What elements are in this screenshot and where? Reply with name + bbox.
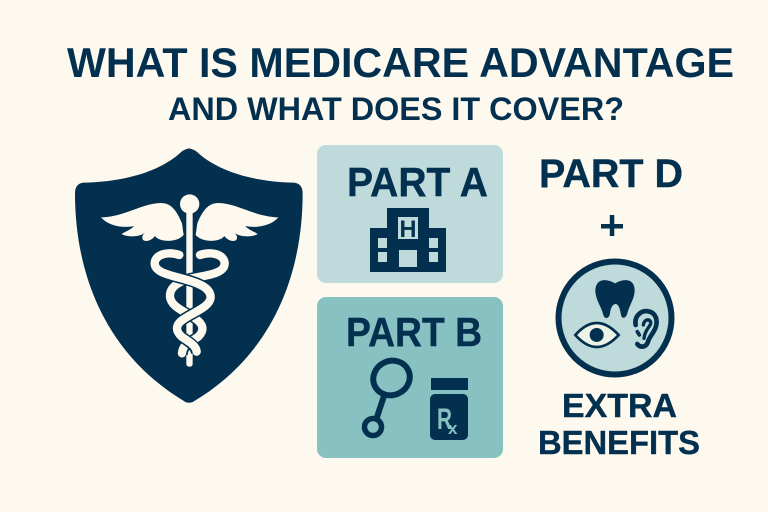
icon: eye bbox=[575, 323, 619, 347]
icon: shield with caduceus bbox=[75, 148, 303, 403]
Part A label: PART A bbox=[347, 159, 488, 205]
panel: Part A bbox=[317, 145, 503, 283]
title bbox=[67, 39, 734, 127]
icon: Rx bottle bbox=[430, 378, 468, 440]
icon: tooth bbox=[595, 280, 635, 318]
icon: magnifier bbox=[364, 355, 415, 436]
plus sign bbox=[601, 215, 623, 236]
panel: Part B bbox=[317, 297, 503, 458]
title: AND WHAT DOES IT COVER? bbox=[168, 91, 624, 127]
Part B label: PART B bbox=[346, 309, 482, 355]
Part D heading: PART D bbox=[539, 152, 683, 196]
icon: extra benefits circle bbox=[558, 262, 672, 374]
Extra benefits label: EXTRA bbox=[562, 387, 677, 424]
Extra benefits label: BENEFITS bbox=[538, 424, 700, 461]
icon: hospital: H bbox=[400, 216, 416, 243]
icon: Rx bottle: R bbox=[437, 403, 452, 436]
title: WHAT IS MEDICARE ADVANTAGE bbox=[67, 39, 734, 86]
icon: hospital bbox=[370, 208, 446, 272]
icon: Rx bottle: x bbox=[448, 419, 458, 438]
Extra benefits label bbox=[538, 387, 700, 461]
icon: ear bbox=[635, 311, 657, 347]
